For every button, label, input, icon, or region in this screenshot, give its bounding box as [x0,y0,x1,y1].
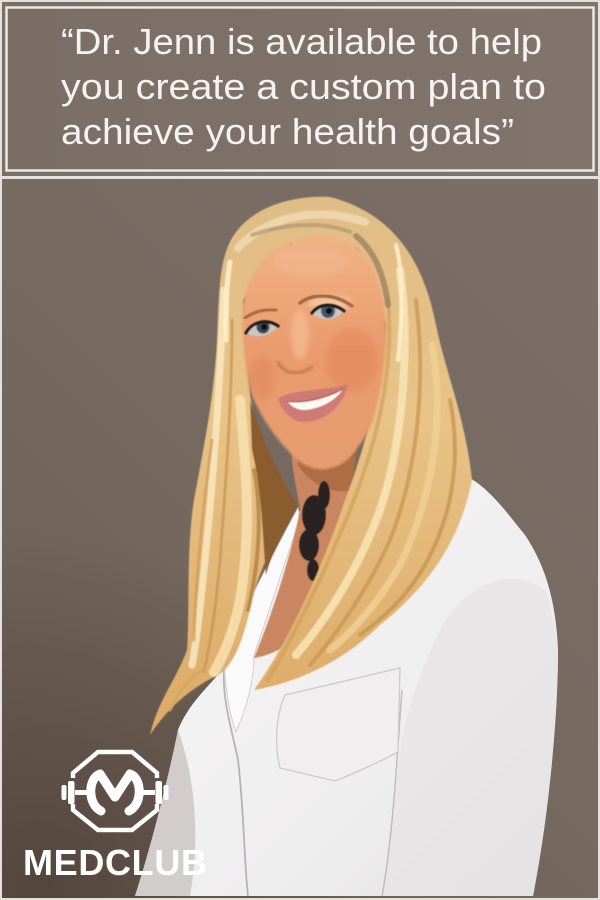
portrait: lower-left coat shadow [135,730,195,896]
portrait: coat left collar [224,508,300,732]
quote text: you create a custom plan to [61,66,546,107]
studio backdrop [2,179,598,898]
quote text: “Dr. Jenn is available to help [61,21,542,62]
logo [23,752,207,883]
logo wordmark: MEDCLUB [23,842,207,883]
portrait: white coat [135,478,558,896]
portrait: left eye [246,320,278,336]
portrait: coat sleeve shading [382,579,558,896]
portrait: cheek blush [328,329,376,390]
portrait photo panel [2,179,598,898]
portrait: chest and neck [254,430,358,658]
portrait: dark necklace [299,481,330,581]
logo octagon [73,752,157,830]
portrait: coat placket [224,668,248,896]
portrait: hair strands [170,214,455,710]
portrait: coat pocket [277,668,400,781]
portrait: smile [278,384,348,422]
portrait: hair [150,197,472,735]
logo dumbbell [62,781,168,804]
portrait: eyebrows [245,310,276,318]
logo letter M [91,774,139,811]
portrait: hair shadow under jaw [250,400,298,575]
quote text: achieve your health goals” [61,111,514,152]
portrait: nose [278,362,312,373]
portrait: face [242,235,386,469]
quote panel [2,2,598,176]
portrait: right eye [312,304,344,319]
